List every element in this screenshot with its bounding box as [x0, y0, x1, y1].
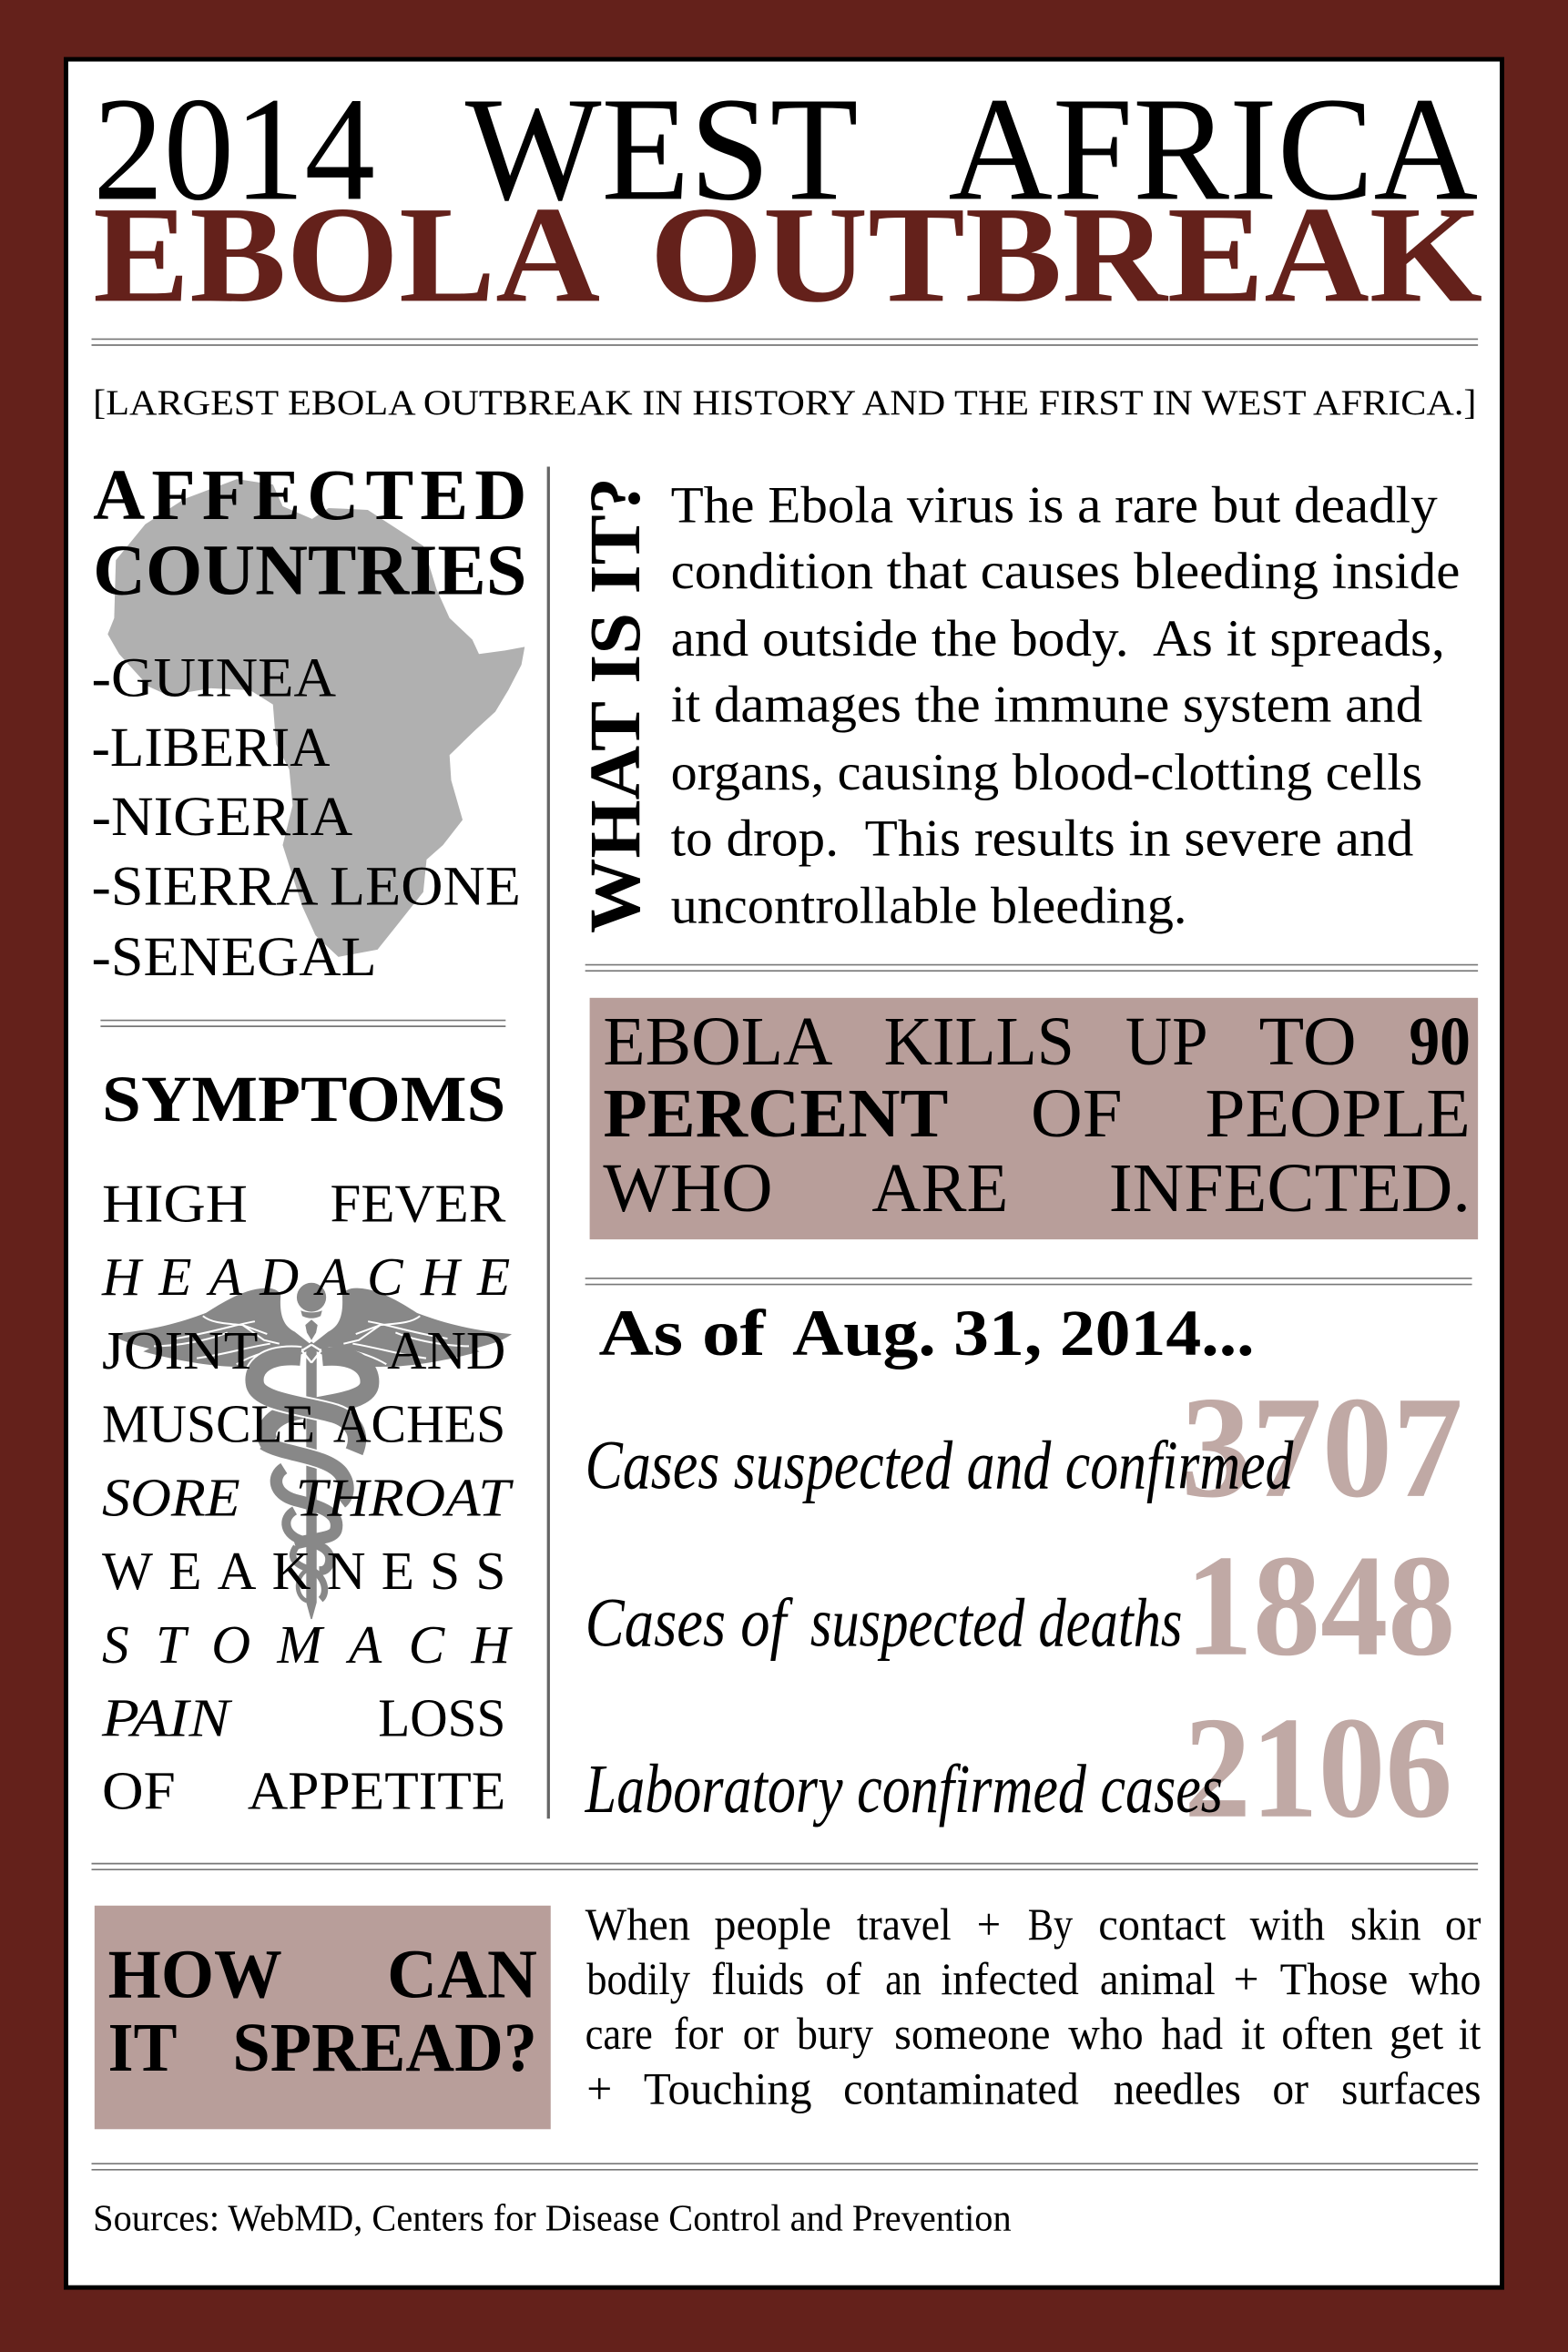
- text: how it spreads: Those: [1280, 1954, 1388, 2004]
- callout text: PERCENT: [603, 1075, 948, 1152]
- text: how it spreads: skin: [1350, 1899, 1421, 1950]
- callout text: UP: [1125, 1003, 1208, 1080]
- text: how it spreads: often: [1281, 2009, 1373, 2059]
- text: how it spreads: bodily: [586, 1954, 690, 2004]
- panel: symptoms: [101, 1062, 514, 1820]
- statistic labels: Cases suspected and confirmed: [585, 1428, 1294, 1504]
- list of symptoms: STOMACH: [102, 1614, 513, 1675]
- callout text: ARE: [871, 1150, 1008, 1227]
- heading: date: As of: [598, 1296, 766, 1369]
- text: how it spreads: travel: [857, 1899, 952, 1950]
- statistic numbers: 2106: [1184, 1687, 1452, 1848]
- panel: affected countries: [92, 456, 526, 988]
- text: how it spreads: [585, 1899, 1481, 2113]
- text: how it spreads: someone: [894, 2009, 1050, 2059]
- text: how it spreads: contact: [1098, 1899, 1227, 1950]
- text: how it spreads: an: [885, 1954, 921, 2004]
- text: how it spreads: or: [1272, 2063, 1308, 2113]
- sources: Sources: WebMD, Centers for Disease Control and Prevention: [93, 2197, 1012, 2239]
- text: how it spreads: By: [1028, 1899, 1073, 1950]
- list of countries: [92, 648, 521, 988]
- heading: what is it (rotated): WHAT IS IT?: [576, 477, 656, 933]
- callout: 90 percent fatality: [590, 998, 1478, 1239]
- heading: date: [598, 1296, 1255, 1369]
- list of symptoms: OF: [102, 1760, 176, 1820]
- text: how it spreads: get: [1390, 2009, 1443, 2059]
- description text: organs, causing blood-clotting cells: [671, 744, 1422, 801]
- list of symptoms: SORE: [102, 1467, 240, 1527]
- statistic numbers: 3707: [1181, 1367, 1463, 1528]
- panel: case statistics: [585, 1296, 1463, 1848]
- text: how it spreads: infected: [941, 1954, 1079, 2004]
- text: how it spreads: with: [1250, 1899, 1325, 1950]
- text: how it spreads: of: [825, 1954, 861, 2004]
- heading: symptoms: SYMPTOMS: [102, 1062, 505, 1135]
- list of symptoms: HIGH: [102, 1173, 248, 1233]
- text: how it spreads: animal: [1100, 1954, 1216, 2004]
- list of countries: -SIERRA LEONE: [92, 857, 521, 918]
- title: [93, 67, 1482, 331]
- callout text: OF: [1031, 1075, 1123, 1152]
- title line: Ebola Outbreak: [93, 178, 1482, 331]
- callout text: PEOPLE: [1205, 1075, 1471, 1152]
- description text: condition that causes bleeding inside: [671, 543, 1460, 600]
- callout: how can it spread: [95, 1906, 551, 2129]
- title line: 2014 West Africa: [93, 67, 1478, 231]
- list of symptoms: [101, 1173, 514, 1820]
- text: how it spreads: it: [1241, 2009, 1265, 2059]
- list of countries: -NIGERIA: [92, 787, 352, 848]
- text: how it spreads: had: [1161, 2009, 1223, 2059]
- list of symptoms: APPETITE: [248, 1760, 505, 1820]
- callout heading: SPREAD?: [232, 2010, 537, 2086]
- icon: caduceus: [111, 1283, 512, 1619]
- statistic labels: suspected deaths: [810, 1585, 1183, 1662]
- list of symptoms: HEADACHE: [101, 1247, 510, 1307]
- text: how it spreads: who: [1409, 1954, 1481, 2004]
- text: how it spreads: fluids: [711, 1954, 804, 2004]
- statistic labels: [585, 1428, 1294, 1828]
- callout text: KILLS: [884, 1003, 1074, 1080]
- statistic labels: Laboratory confirmed cases: [585, 1751, 1223, 1828]
- text: how it spreads: who: [1068, 2009, 1144, 2059]
- description text: uncontrollable bleeding.: [671, 877, 1186, 934]
- description text: The Ebola virus is a rare but deadly: [671, 476, 1438, 534]
- text: how it spreads: contaminated: [843, 2063, 1079, 2113]
- list of symptoms: WEAKNESS: [102, 1541, 505, 1601]
- callout heading: [108, 1936, 537, 2086]
- list of countries: -LIBERIA: [92, 718, 331, 779]
- list of countries: -SENEGAL: [92, 927, 377, 988]
- text: how it spreads: needles: [1114, 2063, 1241, 2113]
- statistic numbers: [1181, 1367, 1463, 1848]
- list of countries: -GUINEA: [92, 648, 336, 709]
- callout text: [603, 1003, 1471, 1227]
- description text: [671, 476, 1460, 934]
- list of symptoms: PAIN: [101, 1688, 233, 1748]
- text: how it spreads: care: [585, 2009, 653, 2059]
- text: how it spreads: it: [1459, 2009, 1481, 2059]
- title line: 2014 West Africa: 2014: [93, 67, 375, 231]
- icon: map of Africa: [107, 479, 524, 957]
- text: how it spreads: +: [977, 1899, 1001, 1950]
- text: how it spreads: or: [1445, 1899, 1481, 1950]
- heading: date: Aug. 31, 2014...: [792, 1296, 1255, 1369]
- list of symptoms: LOSS: [378, 1688, 505, 1748]
- text: how it spreads: or: [743, 2009, 779, 2059]
- list of symptoms: MUSCLE: [102, 1394, 315, 1454]
- callout text: INFECTED.: [1109, 1150, 1471, 1227]
- text: how it spreads: people: [714, 1899, 831, 1950]
- title line: Ebola Outbreak: EBOLA: [93, 178, 600, 331]
- heading: affected countries: [93, 456, 526, 611]
- text: how it spreads: Touching: [644, 2063, 811, 2113]
- callout heading: IT: [108, 2010, 177, 2086]
- list of symptoms: FEVER: [331, 1173, 506, 1233]
- list of symptoms: AND: [387, 1320, 505, 1380]
- callout text: EBOLA: [603, 1003, 833, 1080]
- title line: 2014 West Africa: WEST: [465, 67, 859, 231]
- text: how it spreads: +: [1234, 1954, 1259, 2004]
- callout text: 90: [1409, 1003, 1471, 1080]
- description text: to drop. This results in severe and: [671, 809, 1413, 867]
- subtitle: [LARGEST EBOLA OUTBREAK IN HISTORY AND THE FIRST IN WEST AFRICA.]: [93, 382, 1476, 423]
- list of symptoms: JOINT: [102, 1320, 258, 1380]
- callout heading: CAN: [387, 1936, 537, 2012]
- title line: 2014 West Africa: AFRICA: [948, 67, 1478, 231]
- text: how it spreads: for: [674, 2009, 724, 2059]
- list of symptoms: ACHES: [333, 1394, 505, 1454]
- callout text: TO: [1259, 1003, 1357, 1080]
- statistic numbers: 1848: [1186, 1525, 1455, 1686]
- text: how it spreads: surfaces: [1341, 2063, 1481, 2113]
- heading: affected countries: AFFECTED: [93, 456, 526, 535]
- description text: it damages the immune system and: [671, 677, 1422, 734]
- description text: and outside the body. As it spreads,: [671, 610, 1445, 667]
- text: how it spreads: +: [586, 2063, 612, 2113]
- heading: affected countries: COUNTRIES: [93, 532, 526, 611]
- text: how it spreads: bury: [797, 2009, 873, 2059]
- title line: Ebola Outbreak: OUTBREAK: [650, 178, 1482, 331]
- text: how it spreads: When: [585, 1899, 690, 1950]
- callout text: WHO: [603, 1150, 773, 1227]
- list of symptoms: THROAT: [296, 1467, 514, 1527]
- panel: what is it: [576, 476, 1460, 934]
- statistic labels: Cases of: [585, 1585, 793, 1662]
- callout heading: HOW: [108, 1936, 282, 2012]
